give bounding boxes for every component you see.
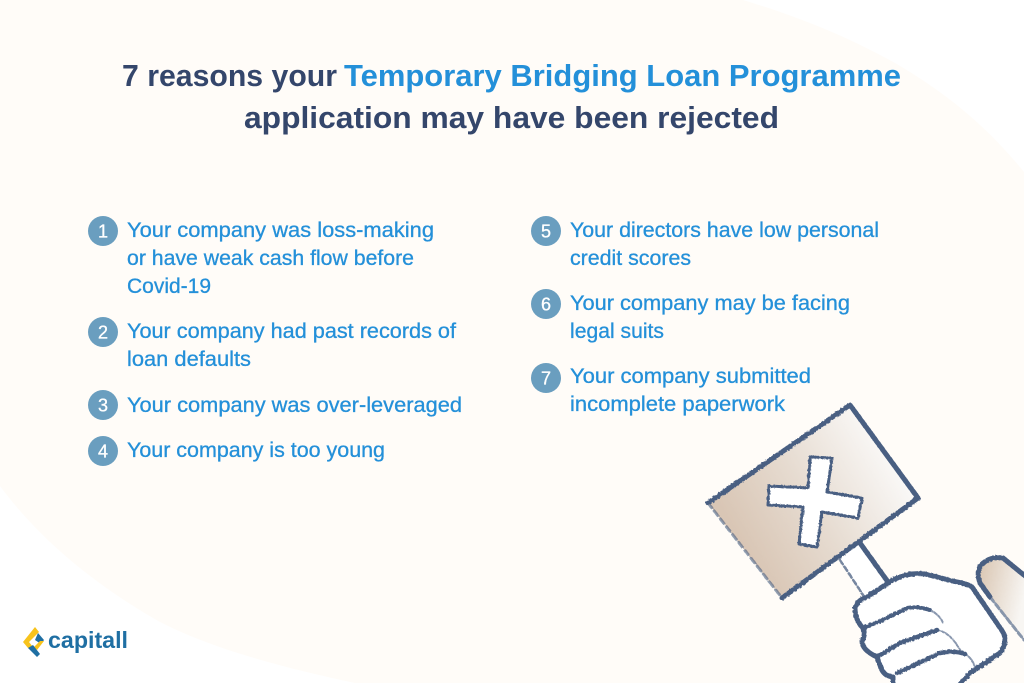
- reason 7: [531, 363, 811, 416]
- reason 2: 2: [98, 322, 108, 342]
- reason 7: Your company submitted: [570, 365, 811, 388]
- logo: capitall: [23, 627, 128, 657]
- reason 1: Your company was loss-making: [127, 219, 434, 242]
- reason 3: Your company was over-leveraged: [127, 394, 462, 417]
- reason 7: incomplete paperwork: [570, 393, 786, 416]
- reason 5: [531, 216, 879, 270]
- reason 2: Your company had past records of: [127, 320, 456, 343]
- reason 3: [88, 390, 462, 420]
- logo wordmark: capitall: [48, 627, 128, 653]
- reason 2: [88, 317, 456, 371]
- finger lines: [863, 607, 975, 673]
- reason 1: Covid-19: [127, 275, 211, 298]
- title: 7 reasons your: [122, 58, 337, 93]
- reason 6: [531, 289, 850, 343]
- reason 1: 1: [98, 222, 108, 242]
- sign handle: [840, 543, 888, 598]
- reason 4: [88, 436, 385, 466]
- reason 6: 6: [541, 294, 551, 314]
- reason 7: 7: [541, 368, 551, 388]
- reason 6: legal suits: [570, 320, 664, 343]
- cross mark: [768, 457, 862, 547]
- illustration: hand holding rejection sign: [708, 405, 1024, 683]
- logo mark: [23, 627, 44, 657]
- title: application may have been rejected: [244, 100, 779, 135]
- hand: [855, 574, 1005, 683]
- reason 1: [88, 216, 434, 298]
- reason 1: or have weak cash flow before: [127, 247, 414, 270]
- reason 6: Your company may be facing: [570, 292, 850, 315]
- sign board: [708, 405, 918, 598]
- reason 4: 4: [98, 442, 108, 462]
- title: Temporary Bridging Loan Programme: [344, 58, 901, 93]
- reason 2: loan defaults: [127, 348, 251, 371]
- reason 5: Your directors have low personal: [570, 219, 879, 242]
- title: [122, 58, 901, 135]
- reason 5: 5: [541, 222, 551, 242]
- reason 5: credit scores: [570, 247, 691, 270]
- reason 4: Your company is too young: [127, 439, 385, 462]
- right sleeve: [978, 558, 1024, 645]
- reason 3: 3: [98, 396, 108, 416]
